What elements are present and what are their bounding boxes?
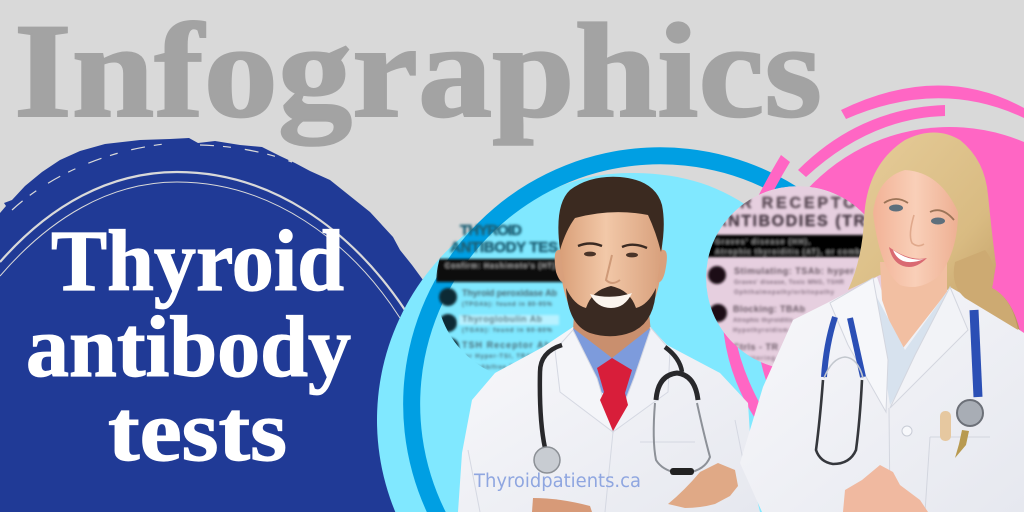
black bar text: Confirm: Hashimoto's (HT) (445, 263, 555, 270)
woman coat button (902, 426, 912, 436)
man coat centre line (468, 420, 745, 512)
woman stethoscope black tubes (816, 380, 862, 464)
woman right lapel (890, 287, 968, 408)
title: Infographics (14, 0, 822, 146)
blurred infographic left: (TPOAb): found in 80-95% (462, 302, 553, 308)
blurred infographic right (700, 186, 890, 370)
blurred infographic right: monitoring (735, 356, 775, 362)
woman pen (955, 430, 969, 458)
man stethoscope tubes (540, 345, 682, 448)
blurred infographic right: Atrophic thyroiditis (AT), or combo (715, 249, 865, 256)
blurred infographic right: Graves' disease, Toxic MNG, TSHR (734, 280, 845, 286)
man eye left (584, 252, 596, 256)
navy brush circle (0, 138, 470, 512)
blurred heading right: R RECEPTOR (740, 195, 870, 212)
blurred subheading right: ANTIBODIES (TR (715, 213, 865, 230)
outer cyan circle (377, 180, 857, 512)
blurred infographic left: TgAb/free T3 (472, 365, 518, 371)
pink circle (756, 127, 1024, 512)
list row 1 (708, 266, 726, 284)
man nose (606, 255, 620, 283)
woman face (873, 170, 958, 287)
blurred infographic right: Atrophic thyroiditis (733, 318, 794, 324)
woman nose (910, 215, 924, 246)
man blue collar (573, 328, 651, 400)
inner cyan shape (420, 173, 790, 512)
blurred infographic right: Blocking: TBAb (733, 304, 806, 314)
doctor: man (458, 177, 760, 512)
man left lapel (555, 330, 613, 432)
man stethoscope earpiece (670, 468, 694, 475)
man stethoscope headset (656, 373, 698, 400)
man brows (578, 244, 647, 248)
pink arc stripe 2 (798, 105, 945, 177)
man red tie (597, 358, 632, 431)
man stethoscope chest piece (534, 447, 560, 473)
man smile (590, 293, 632, 308)
woman hands (843, 465, 928, 512)
watermark: Thyroidpatients.ca (473, 471, 641, 492)
man face (560, 205, 662, 334)
man ears (555, 250, 667, 282)
woman teeth (893, 250, 924, 262)
black bar left (436, 259, 566, 282)
blurred infographic left: Thyroglobulin Ab (462, 314, 542, 324)
blurred infographic left: Thyroid peroxidase Ab (462, 288, 558, 298)
woman left lapel (830, 278, 888, 412)
pink arc stripe 3 (723, 155, 790, 420)
blurred infographic right: Ophthalmopathy/orbitopathy (734, 290, 835, 296)
blurred panel base (706, 186, 890, 370)
blurred heading left: THYROID (460, 222, 522, 239)
brush scratches (12, 143, 292, 210)
woman white coat (740, 277, 1024, 512)
man right lapel (613, 328, 670, 432)
heading line 2: antibody (26, 298, 351, 395)
heading line 3: tests (108, 382, 287, 479)
list row 2 (709, 304, 727, 322)
woman stethoscope blue left (824, 317, 863, 377)
woman coat seams (889, 408, 990, 512)
woman tongue depressor (940, 411, 951, 441)
woman stethoscope metal arch (824, 357, 863, 378)
man lower arm (532, 498, 592, 512)
man hair (558, 177, 664, 252)
list row 3: Ctrls - TR (733, 342, 778, 352)
woman hair curl (954, 250, 1018, 330)
blurred infographic left: (TGAb): found in 60-80% (462, 328, 553, 334)
woman eye right (931, 218, 945, 224)
man crossed hand (668, 463, 738, 508)
heading line 1: Thyroid (51, 212, 344, 309)
woman eye left (889, 204, 903, 212)
blurred infographic left: or Hyper-TSI, TRAb (465, 354, 535, 360)
woman back hair (848, 132, 1020, 331)
man eye right (626, 253, 638, 257)
black bar right (700, 235, 875, 257)
list row 3 (451, 336, 461, 350)
blurred infographic right: Stimulating: TSAb: hyper (734, 266, 854, 276)
list row 1 (439, 288, 457, 306)
thick arc on navy circle (0, 172, 405, 310)
doctor: woman (740, 132, 1024, 512)
woman neck (880, 262, 947, 352)
woman shirt (873, 290, 948, 405)
blurred infographic left: TSH Receptor Ab (462, 340, 550, 350)
blurred infographic left (436, 222, 566, 371)
blurred infographic right: Graves' disease (HH), (715, 239, 810, 246)
pink arc stripe 1 (841, 85, 1024, 119)
man beard (566, 286, 656, 336)
blue ring (403, 147, 805, 512)
woman stethoscope blue right (974, 310, 978, 397)
man stethoscope metal tubes (654, 403, 710, 473)
gray wedge inside ring (517, 165, 800, 215)
woman brows (884, 199, 954, 220)
blurred subheading left: ANTIBODY TES (450, 239, 558, 256)
heading: Thyroid antibody tests (26, 212, 351, 479)
list row 2 (439, 314, 457, 332)
blurred infographic right: Hypothyroidism (733, 328, 788, 334)
man white coat (458, 327, 760, 512)
man neck (572, 300, 652, 375)
woman stethoscope chest piece (957, 400, 983, 426)
thin arc on navy circle (0, 182, 400, 318)
woman smile (889, 247, 927, 267)
